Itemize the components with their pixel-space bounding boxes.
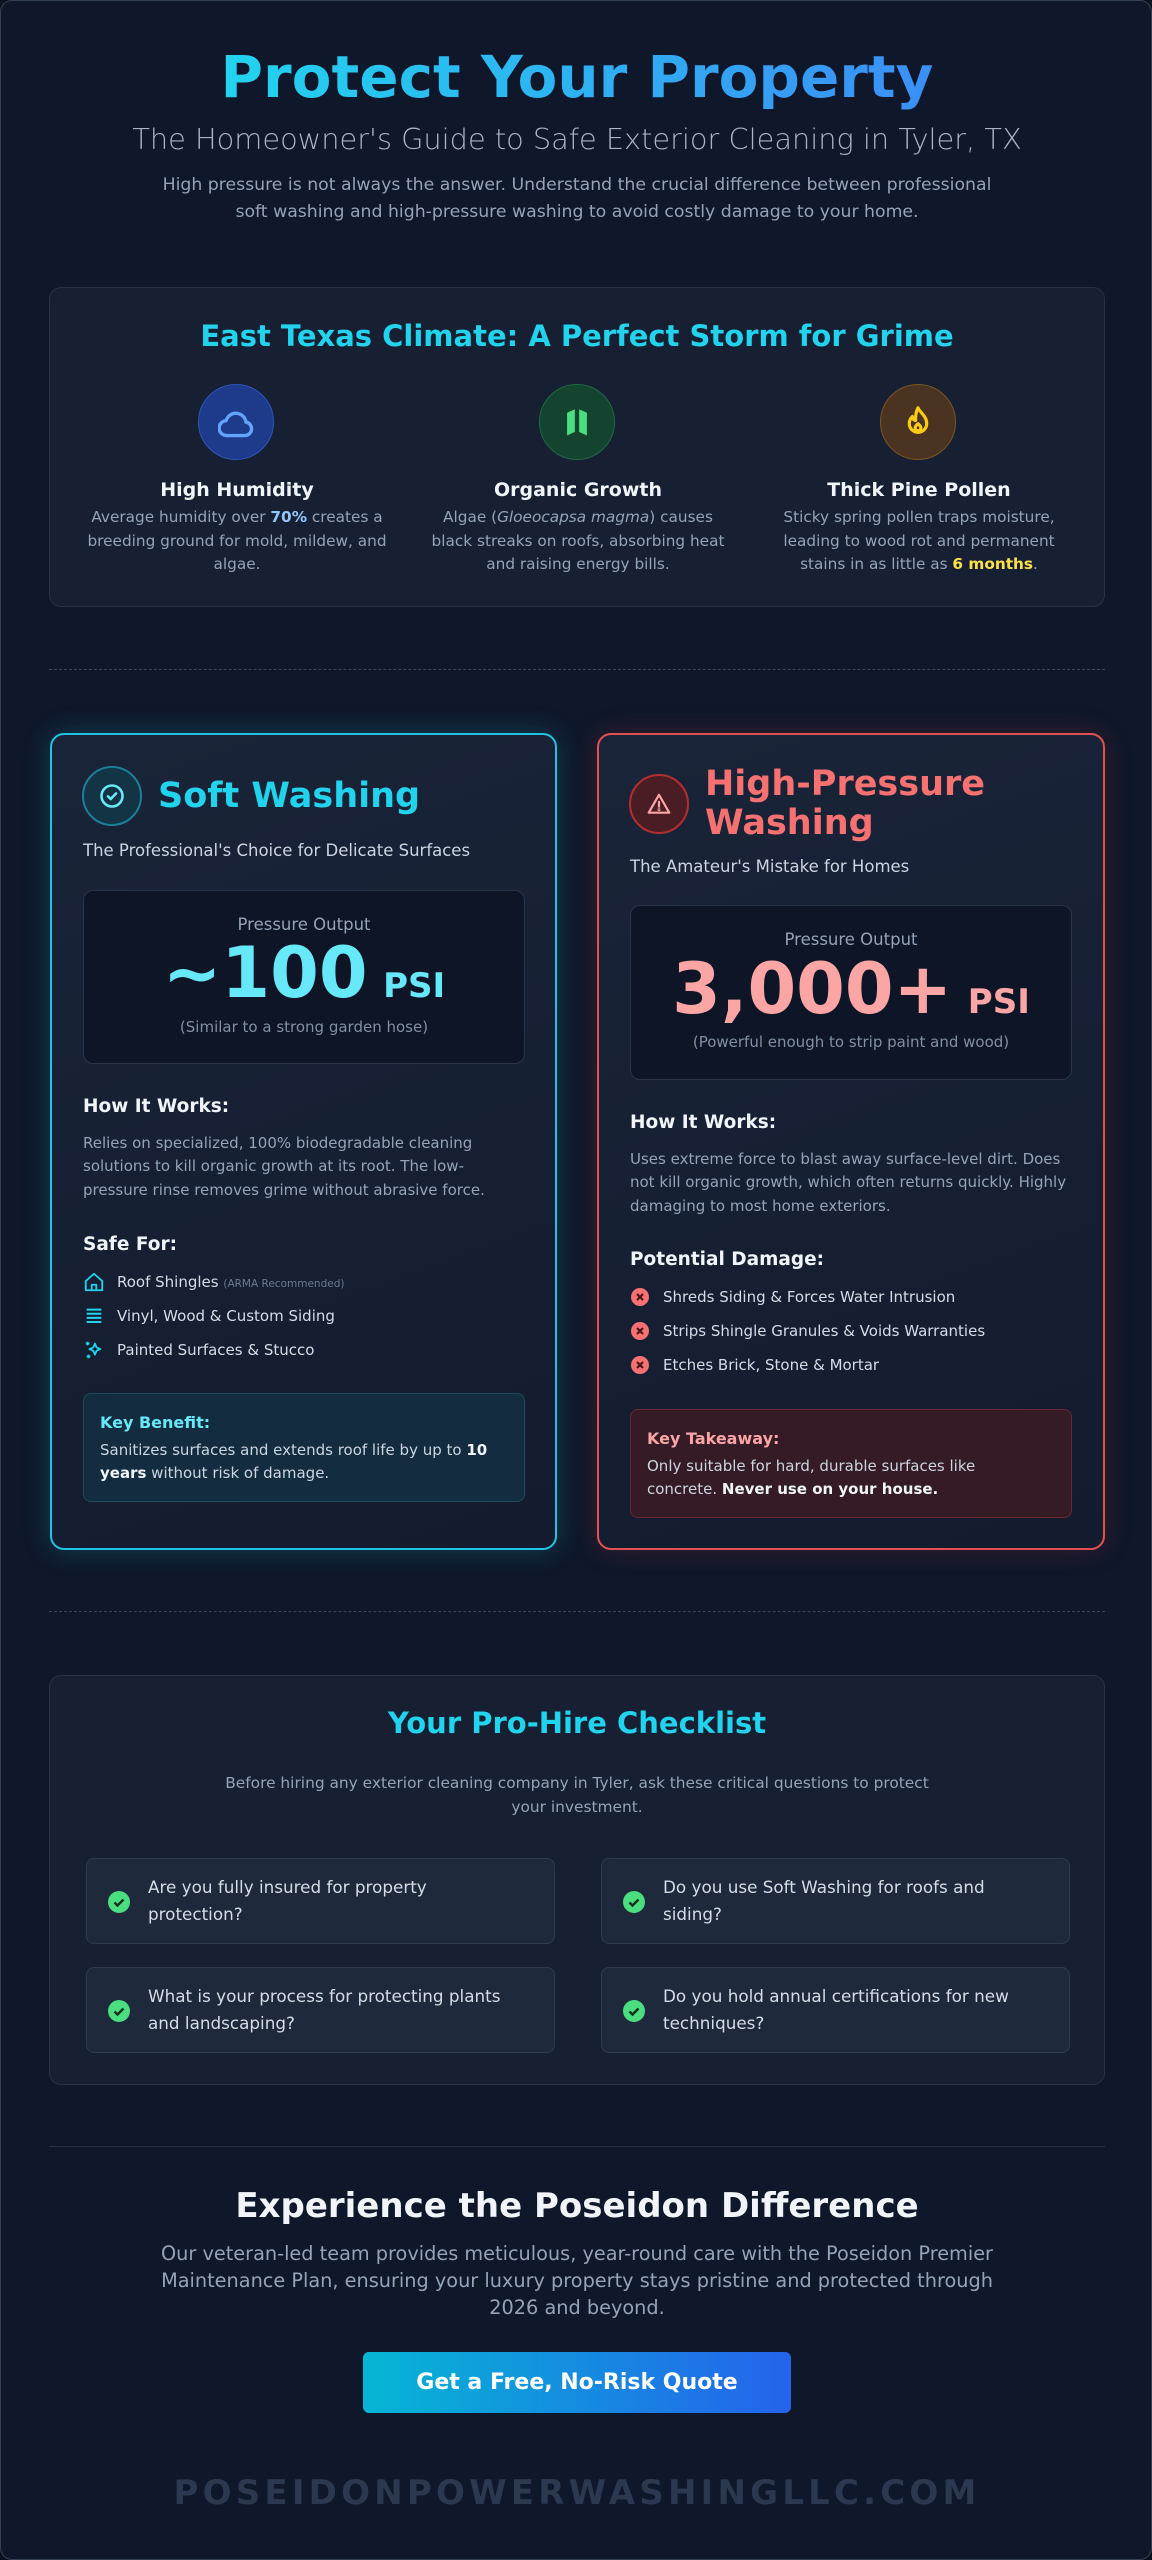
how it works: How It Works:	[83, 1096, 229, 1117]
check item 4: Do you hold annual certifications for new	[663, 1986, 1009, 2006]
panel: high pressure: Uses extreme force to blast away surface-level dirt. Does not kill organic growth, which often returns quickly. Highly damaging to most home exteriors.	[630, 1150, 1066, 1215]
panel: climate	[49, 287, 1105, 607]
item: high humidity: High Humidity	[160, 479, 314, 501]
checklist heading: Your Pro-Hire Checklist	[388, 1706, 766, 1740]
pressure box: ~100 PSI	[163, 932, 445, 1014]
pressure box: Pressure Output	[237, 915, 370, 934]
item: pine pollen	[783, 479, 1055, 573]
key benefit callout: Key Benefit:	[100, 1413, 210, 1432]
key benefit callout: Sanitizes surfaces and extends roof life by up to 10 years without risk of damage.	[100, 1441, 487, 1482]
safe for list: Safe For:	[83, 1234, 177, 1255]
item: high humidity	[87, 479, 387, 573]
soft subtitle: The Professional's Choice for Delicate Surfaces	[83, 841, 470, 860]
check item 4	[601, 1967, 1070, 2053]
check item 3: What is your process for protecting plants	[148, 1986, 500, 2006]
pressure box: (Similar to a strong garden hose)	[180, 1018, 428, 1036]
cta paragraph: Maintenance Plan, ensuring your luxury property stays pristine and protected through	[161, 2269, 993, 2292]
check item 2: siding?	[663, 1904, 722, 1924]
item: pine pollen: Sticky spring pollen traps moisture, leading to wood rot and permanent stains in as little as 6 months.	[783, 508, 1055, 573]
check item 2	[601, 1858, 1070, 1944]
intro text: soft washing and high-pressure washing to avoid costly damage to your home.	[235, 202, 919, 222]
checklist intro: Before hiring any exterior cleaning company in Tyler, ask these critical questions to protect	[225, 1774, 929, 1792]
key benefit callout	[83, 1393, 525, 1502]
damage list: Potential Damage:	[630, 1249, 824, 1270]
item: high humidity: Average humidity over 70% creates a breeding ground for mold, mildew, and algae.	[87, 508, 387, 573]
hp heading: Washing	[705, 803, 874, 843]
check item 3	[86, 1967, 555, 2053]
cta button	[363, 2352, 791, 2413]
hp heading: High-Pressure	[705, 764, 985, 804]
damage item 2: Strips Shingle Granules & Voids Warranties	[663, 1322, 985, 1340]
pressure box: (Powerful enough to strip paint and wood)	[693, 1033, 1009, 1051]
check item 3: and landscaping?	[148, 2013, 295, 2033]
hp subtitle: The Amateur's Mistake for Homes	[630, 857, 909, 876]
icon: cloud	[198, 384, 274, 460]
pressure box: 3,000+ PSI	[672, 948, 1030, 1030]
panel: checklist	[49, 1675, 1105, 2085]
climate heading: East Texas Climate: A Perfect Storm for Grime	[200, 319, 954, 353]
icon: warning	[629, 774, 689, 834]
damage item 3: Etches Brick, Stone & Mortar	[663, 1356, 879, 1374]
icon: flame	[880, 384, 956, 460]
icon: check circle	[82, 766, 142, 826]
cta heading: Experience the Poseidon Difference	[235, 2186, 919, 2226]
key takeaway callout: Key Takeaway:	[647, 1429, 779, 1448]
intro text: High pressure is not always the answer. Understand the crucial difference between professional	[163, 175, 991, 195]
cta button: Get a Free, No-Risk Quote	[416, 2370, 738, 2395]
panel: soft washing	[50, 733, 557, 1550]
pressure box	[630, 905, 1072, 1080]
item: pine pollen: Thick Pine Pollen	[827, 479, 1011, 501]
key takeaway callout: Only suitable for hard, durable surfaces like concrete. Never use on your house.	[647, 1457, 975, 1498]
item: organic growth: Algae (Gloeocapsa magma) causes black streaks on roofs, absorbing heat and raising energy bills.	[432, 508, 724, 573]
panel: soft washing: Relies on specialized, 100% biodegradable cleaning solutions to kill organic growth at its root. The low-pressure rinse removes grime without abrasive force.	[83, 1134, 485, 1199]
check item 4: techniques?	[663, 2013, 764, 2033]
item: organic growth: Organic Growth	[494, 479, 662, 501]
cta paragraph: Our veteran-led team provides meticulous, year-round care with the Poseidon Premier	[161, 2242, 993, 2265]
subtitle: The Homeowner's Guide to Safe Exterior Cleaning in Tyler, TX	[132, 122, 1022, 156]
cta paragraph	[161, 2242, 993, 2319]
check item 2: Do you use Soft Washing for roofs and	[663, 1877, 985, 1897]
how it works: How It Works:	[630, 1112, 776, 1133]
cta paragraph: 2026 and beyond.	[489, 2296, 665, 2319]
panel: high pressure	[597, 733, 1105, 1550]
item: organic growth	[432, 479, 724, 573]
list item: siding: Vinyl, Wood & Custom Siding	[117, 1307, 335, 1325]
list item: roof: Roof Shingles (ARMA Recommended)	[117, 1273, 344, 1291]
key takeaway callout	[630, 1409, 1072, 1518]
footer url: POSEIDONPOWERWASHINGLLC.COM	[173, 2473, 981, 2513]
damage item 1: Shreds Siding & Forces Water Intrusion	[663, 1288, 955, 1306]
list item: painted: Painted Surfaces & Stucco	[117, 1341, 314, 1359]
check item 1: protection?	[148, 1904, 243, 1924]
icon: map	[539, 384, 615, 460]
check item 1	[86, 1858, 555, 1944]
checklist intro: your investment.	[511, 1798, 643, 1816]
soft heading: Soft Washing	[158, 776, 420, 816]
intro text	[163, 175, 991, 222]
checklist intro	[225, 1774, 929, 1816]
title: Protect Your Property	[221, 43, 933, 111]
pressure box: Pressure Output	[784, 930, 918, 949]
hp heading	[705, 764, 985, 843]
check item 1: Are you fully insured for property	[148, 1877, 427, 1897]
pressure box	[83, 890, 525, 1064]
